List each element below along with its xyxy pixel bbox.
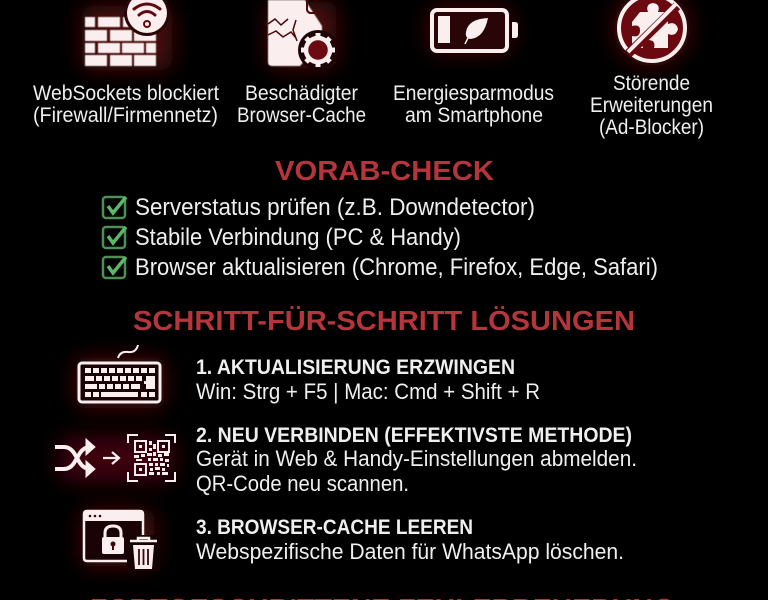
icon: firewall wall with wifi [82,0,172,70]
step 2 text [196,423,637,496]
label: Beschädigter Browser-Cache: Beschädigter [245,82,358,105]
icon: shuffle and QR code [55,435,175,482]
label: Störende Erweiterungen [590,72,713,139]
check item: Verbindung: Stabile Verbindung (PC & Handy) [135,224,461,251]
check item: Browser: Browser aktualisieren (Chrome, Firefox, Edge, Safari) [135,254,658,281]
label: Energiesparmodus am Smartphone: Energiesparmodus [393,82,554,105]
icon: keyboard [76,345,164,408]
label: Energiesparmodus am Smartphone: am Smartphone [405,104,543,127]
label: WebSockets blockiert: WebSockets blockiert [33,82,219,105]
step 1 text: Win: Strg + F5 | Mac: Cmd + Shift + R [196,379,540,404]
icon: blocked puzzle extension [614,0,690,66]
step 3 text: Webspezifische Daten für WhatsApp löschen. [196,539,624,564]
checklist [103,194,658,281]
label: Beschädigter Browser-Cache [237,82,366,127]
icon: battery with leaf [430,8,518,52]
label: Beschädigter Browser-Cache: Browser-Cache [237,104,366,127]
icon: QR code [128,435,175,481]
check item: Serverstatus: Serverstatus prüfen (z.B. Downdetector) [135,194,535,221]
icon: browser lock and trash [82,510,160,571]
step 2 text: 2. NEU VERBINDEN (EFFEKTIVSTE METHODE) [196,423,632,447]
label: WebSockets blockiert [33,82,219,127]
arrow [103,452,119,464]
step 1 text: 1. AKTUALISIERUNG ERZWINGEN [196,355,515,379]
heading: Vorab-Check: VORAB-CHECK [275,155,494,186]
heading: Schritt-für-Schritt: SCHRITT-FÜR-SCHRITT LÖSUNGEN [133,305,635,336]
step 2 text: Gerät in Web & Handy-Einstellungen abmelden. [196,446,637,471]
label: Störende Erweiterungen: (Ad-Blocker) [599,116,704,139]
step 3 text: 3. BROWSER-CACHE LEEREN [196,515,473,539]
step 2 text: QR-Code neu scannen. [196,471,409,496]
step 3 text [196,515,624,564]
label: Energiesparmodus am Smartphone [393,82,554,127]
label: WebSockets blockiert: (Firewall/Firmennetz) [33,104,218,127]
icon: shuffle arrows [55,439,95,477]
label: Störende Erweiterungen: Störende [613,72,690,95]
label: Störende Erweiterungen: Erweiterungen [590,94,713,117]
step 1 text [196,355,540,404]
icon: damaged file with gear [268,0,338,70]
